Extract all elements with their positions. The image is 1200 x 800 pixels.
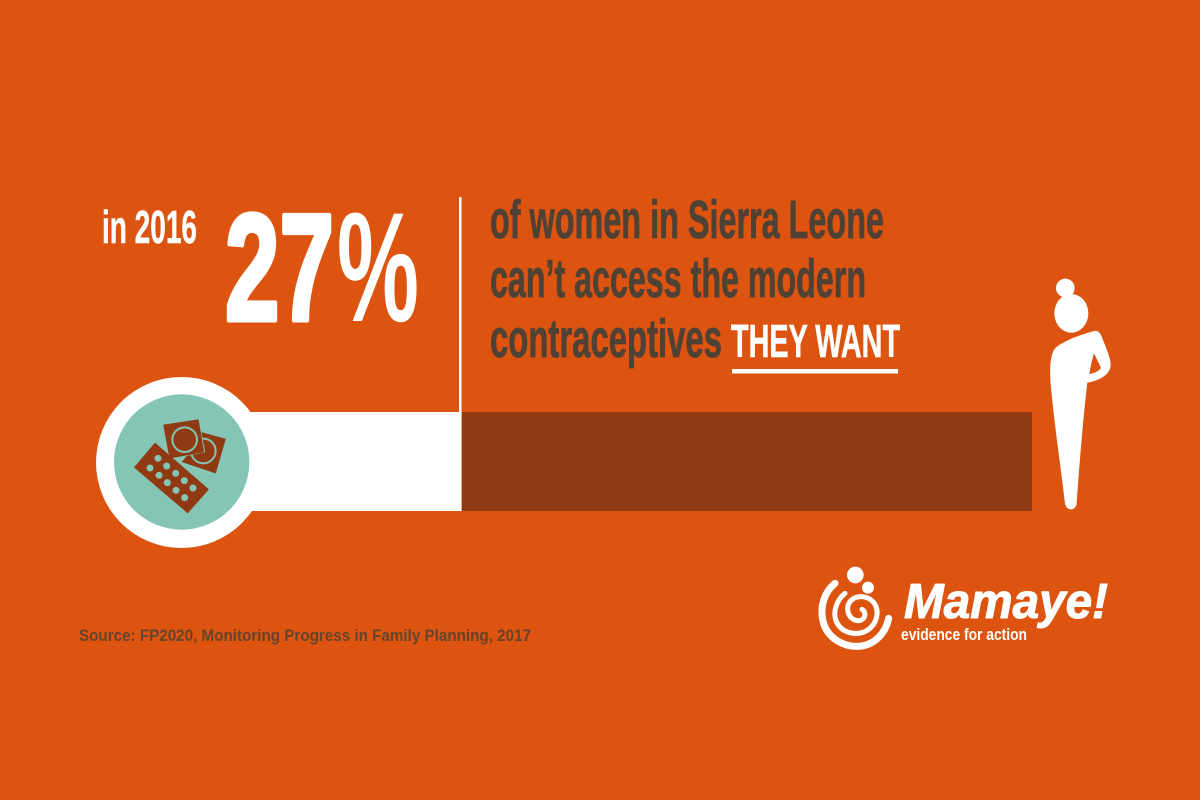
- icon: woman figure: [1050, 279, 1111, 509]
- big percentage: 27: [225, 183, 334, 353]
- headline statement: [490, 190, 884, 369]
- headline statement: contraceptives: [490, 309, 722, 369]
- logo tagline: evidence for action: [901, 625, 1027, 644]
- logo wordmark: Mamaye!: [904, 575, 1108, 629]
- source note: Source: FP2020, Monitoring Progress in Family Planning, 2017: [79, 626, 531, 645]
- icon: contraceptives badge: [96, 377, 267, 548]
- headline statement: can’t access the modern: [490, 249, 866, 309]
- logo: Mamaye: [822, 567, 1108, 646]
- emphasised phrase: THEY WANT: [731, 315, 900, 367]
- headline statement: of women in Sierra Leone: [490, 190, 884, 250]
- logo mark: [822, 567, 889, 646]
- year label: in 2016: [102, 201, 197, 253]
- progress bar: remaining: [462, 412, 1032, 511]
- progress bar: 27 percent: [240, 412, 462, 511]
- emphasised phrase: [731, 315, 900, 374]
- big percentage: %: [337, 181, 419, 355]
